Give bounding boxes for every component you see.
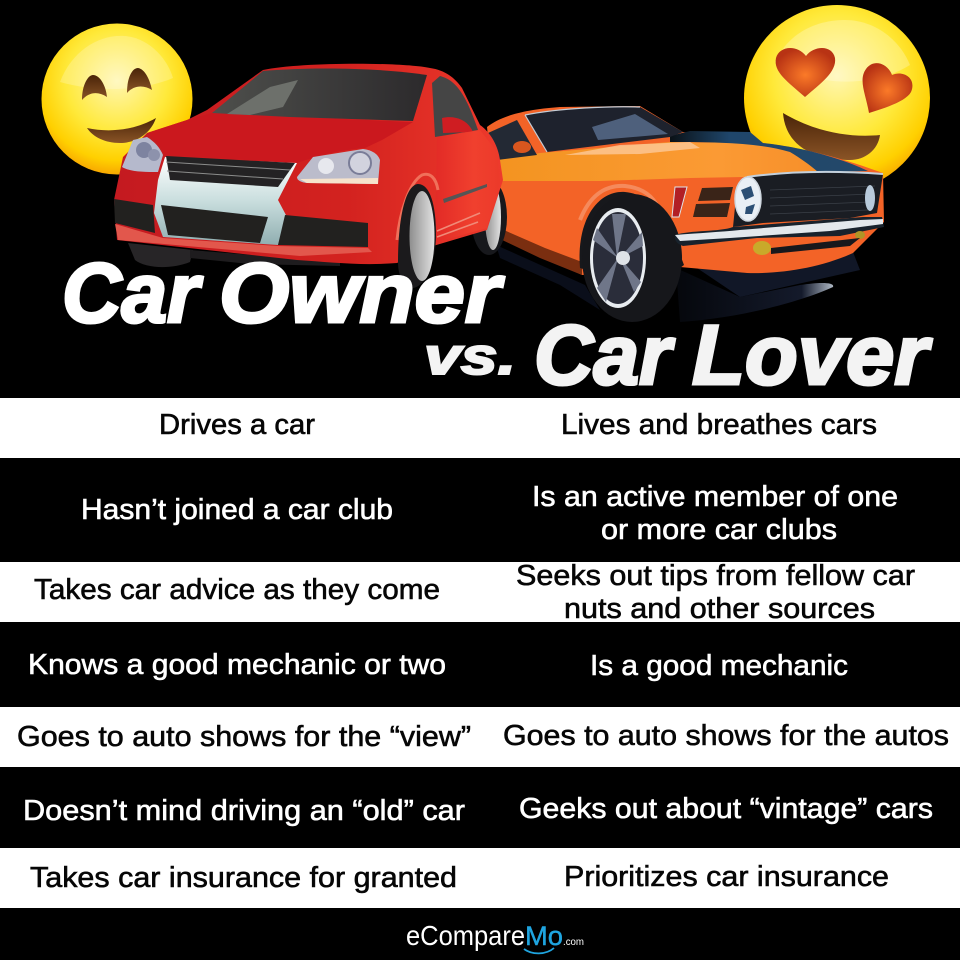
stripe on hood [670, 131, 868, 172]
lower grille [161, 205, 268, 243]
upper grille [166, 156, 295, 187]
title: Car Owner: Car [62, 246, 203, 340]
car body [487, 106, 884, 275]
right dark intake [278, 215, 368, 247]
door panel [434, 130, 500, 243]
logo: eCompareMo.com: Mo [525, 921, 563, 951]
car body [114, 64, 503, 264]
row 2 lover: Is an active member of one [532, 481, 898, 513]
row 4 owner: Knows a good mechanic or two [28, 649, 446, 681]
side marker [672, 187, 687, 217]
row 1 owner: Drives a car [159, 409, 315, 441]
wheel arch [580, 192, 684, 290]
left dark intake [114, 199, 155, 233]
mirror [442, 117, 473, 133]
icon: heart eyes emoji [744, 5, 930, 191]
row 5 lover: Goes to auto shows for the autos [503, 720, 949, 752]
illustration: red hatchback car [114, 64, 507, 288]
fog lights [753, 241, 771, 255]
windshield highlight [227, 80, 298, 115]
title: Car Lover [534, 308, 932, 402]
title: Car Owner: Owner [219, 246, 505, 340]
row 5 owner: Goes to auto shows for the “view” [17, 721, 471, 753]
row 2 lover [532, 481, 898, 546]
wheel arch highlight [397, 174, 438, 240]
lower sill [497, 227, 582, 275]
vents [693, 187, 733, 217]
row 3 lover [516, 560, 915, 625]
front tire [398, 184, 436, 288]
row 6 owner: Doesn’t mind driving an “old” car [23, 795, 465, 827]
front left tire [128, 243, 193, 267]
headlight [735, 177, 761, 221]
row 6 lover: Geeks out about “vintage” cars [519, 793, 933, 825]
front lip [115, 224, 372, 256]
title: vs.: vs. [424, 328, 516, 386]
hood [147, 113, 413, 163]
title: Car Owner [62, 246, 505, 340]
air dam [697, 252, 860, 297]
windshield reflection [592, 114, 668, 140]
title: Car Lover: Car [534, 308, 675, 402]
title: Car Lover: Lover [692, 308, 932, 402]
side window [488, 120, 537, 160]
row 2 lover: or more car clubs [601, 514, 837, 546]
row 5 band [0, 707, 960, 767]
chrome bumper [675, 217, 884, 246]
tire [582, 194, 682, 322]
logo: eCompareMo.com [406, 920, 584, 953]
illustration: orange muscle car [487, 106, 884, 322]
mirror [513, 141, 531, 153]
row 3 band [0, 562, 960, 622]
logo: eCompareMo.com: eCompare [406, 920, 525, 951]
row 3 owner: Takes car advice as they come [34, 574, 440, 606]
ground shadow front [676, 268, 833, 322]
row 3 lover: Seeks out tips from fellow car [516, 560, 915, 592]
sill highlight [437, 213, 480, 237]
row 7 owner: Takes car insurance for granted [30, 862, 457, 894]
door trim [443, 184, 487, 203]
side window [432, 76, 478, 137]
row 4 lover: Is a good mechanic [590, 650, 848, 682]
row 1 lover: Lives and breathes cars [561, 409, 877, 441]
logo: eCompareMo.com: .com [563, 937, 584, 948]
row 3 lover: nuts and other sources [564, 593, 875, 625]
row 7 lover: Prioritizes car insurance [564, 861, 889, 893]
row 7 band [0, 848, 960, 908]
windshield [525, 107, 683, 152]
right headlight [297, 149, 380, 184]
upper orange band [497, 142, 866, 181]
ground shadow left [496, 245, 600, 310]
rear wheel [471, 179, 507, 255]
windshield [212, 68, 427, 121]
grille [733, 172, 883, 227]
silver bumper [154, 157, 297, 245]
row 2 owner: Hasn’t joined a car club [81, 494, 393, 526]
row 1 band [0, 398, 960, 458]
left headlight [122, 137, 163, 172]
hood highlight [565, 142, 700, 155]
rim [590, 208, 646, 308]
icon: smiling emoji [42, 24, 192, 174]
under body dark [190, 250, 340, 266]
